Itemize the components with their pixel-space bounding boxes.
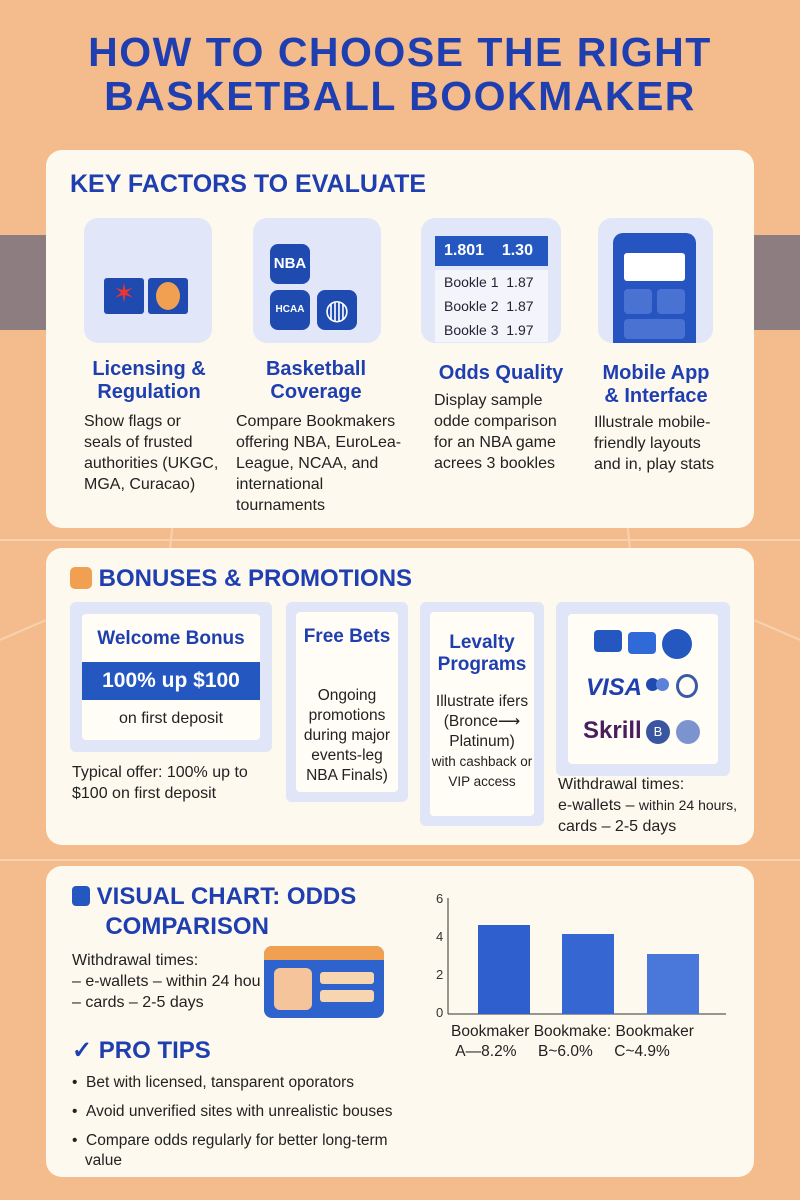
icon: mobile (598, 218, 713, 343)
text: coverage: Basketball (266, 358, 366, 380)
tips list: • Compare odds regularly for better long-term (72, 1132, 388, 1149)
text: withdrawal: – e-wallets – within 24 hou (72, 973, 261, 990)
icon: licensing: ✶ (113, 278, 135, 308)
text: withdrawal: Withdrawal times: (72, 952, 198, 969)
panel: key factors: Illustrale mobile-friendly layouts and in, play stats (594, 414, 714, 473)
text: withdrawal (72, 952, 261, 1011)
tips list (72, 1074, 392, 1169)
card: loyalty: Illustrate ifers (Bronce⟶ Platinum) (436, 693, 528, 750)
heading (72, 883, 356, 940)
panel: bonuses: Typical offer: 100% up to $100 on first deposit (72, 764, 248, 802)
title: HOW TO CHOOSE THE RIGHT (88, 29, 712, 75)
icon: licensing (84, 218, 212, 343)
panel: chart and tips (46, 866, 754, 1177)
heading: KEY FACTORS TO EVALUATE (70, 170, 426, 198)
card: payments (556, 602, 730, 776)
heading: pro tips: ✓ PRO TIPS (72, 1037, 211, 1064)
panel: key factors: Show flags or seals of frusted authorities (UKGC, MGA, Curacao) (84, 413, 218, 493)
panel: key factors (46, 150, 754, 528)
card: free bets: Ongoing promotions during major events-leg NBA Finals) (304, 687, 390, 784)
heading: BONUSES & PROMOTIONS (99, 565, 412, 592)
text: odds quality: Odds Quality (439, 362, 563, 384)
panel: bonuses (46, 548, 754, 845)
text: licensing: Regulation (97, 381, 201, 403)
icon: odds table: Bookle 3 1.97 (444, 322, 534, 338)
card: welcome bonus: Welcome Bonus (97, 628, 245, 649)
icon: odds table: Bookle 2 1.87 (444, 298, 534, 314)
panel: key factors: Display sample odde comparison for an NBA game acrees 3 bookles (434, 392, 557, 472)
text: mobile: & Interface (604, 385, 708, 407)
card: welcome bonus (70, 602, 272, 752)
bar chart: 0 (436, 1005, 443, 1020)
card: free bets (286, 602, 408, 802)
text: withdrawal: – cards – 2-5 days (72, 994, 204, 1011)
panel: chart and tips: A—8.2% B~6.0% C~4.9% (455, 1043, 670, 1060)
panel: bonuses: cards – 2-5 days (558, 818, 676, 835)
text: mobile: Mobile App (602, 362, 710, 384)
panel: bonuses: Withdrawal times: (558, 776, 684, 793)
icon: coverage: HCAA (276, 304, 304, 315)
card: loyalty: with cashback or VIP access (432, 754, 532, 789)
text: mobile (602, 362, 710, 407)
bar chart: 4 (436, 929, 443, 944)
bar chart (436, 891, 726, 1020)
text: coverage (266, 358, 366, 403)
card: payments: VISA (586, 674, 642, 701)
icon: coverage (253, 218, 381, 343)
card: loyalty: Levalty (449, 632, 515, 653)
card: loyalty (420, 602, 544, 826)
card: payments: Skrill (583, 717, 642, 744)
panel: bonuses: e-wallets – within 24 hours, (558, 797, 737, 814)
text: licensing: Licensing & (92, 358, 206, 380)
tips list: value (85, 1152, 122, 1169)
icon: coverage: ◍ (325, 294, 349, 325)
card: free bets: Free Bets (304, 626, 390, 647)
panel: chart and tips: Bookmaker Bookmake: Bookmaker (451, 1023, 694, 1040)
panel: key factors: Compare Bookmakers offering NBA, EuroLea-League, NCAA, and international tournaments (236, 413, 401, 514)
card: loyalty: Programs (438, 654, 526, 675)
title (88, 29, 712, 119)
text: coverage: Coverage (270, 381, 362, 403)
tips list: • Bet with licensed, tansparent oporators (72, 1074, 354, 1091)
icon: coverage: NBA (274, 255, 306, 272)
card: welcome bonus: on first deposit (119, 710, 223, 727)
card: welcome bonus: 100% up $100 (102, 669, 240, 692)
icon: odds table (421, 218, 561, 343)
tips list: • Avoid unverified sites with unrealistic bouses (72, 1103, 392, 1120)
bar chart: 2 (436, 967, 443, 982)
heading: COMPARISON (105, 913, 269, 940)
icon: odds table: 1.801 1.30 (444, 242, 533, 259)
title: BASKETBALL BOOKMAKER (104, 73, 696, 119)
bar chart: 6 (436, 891, 443, 906)
heading: VISUAL CHART: ODDS (97, 883, 356, 910)
card: payments: B (654, 724, 662, 739)
icon: id card (264, 946, 384, 1018)
icon: odds table: Bookle 1 1.87 (444, 274, 534, 290)
text: licensing (92, 358, 206, 403)
